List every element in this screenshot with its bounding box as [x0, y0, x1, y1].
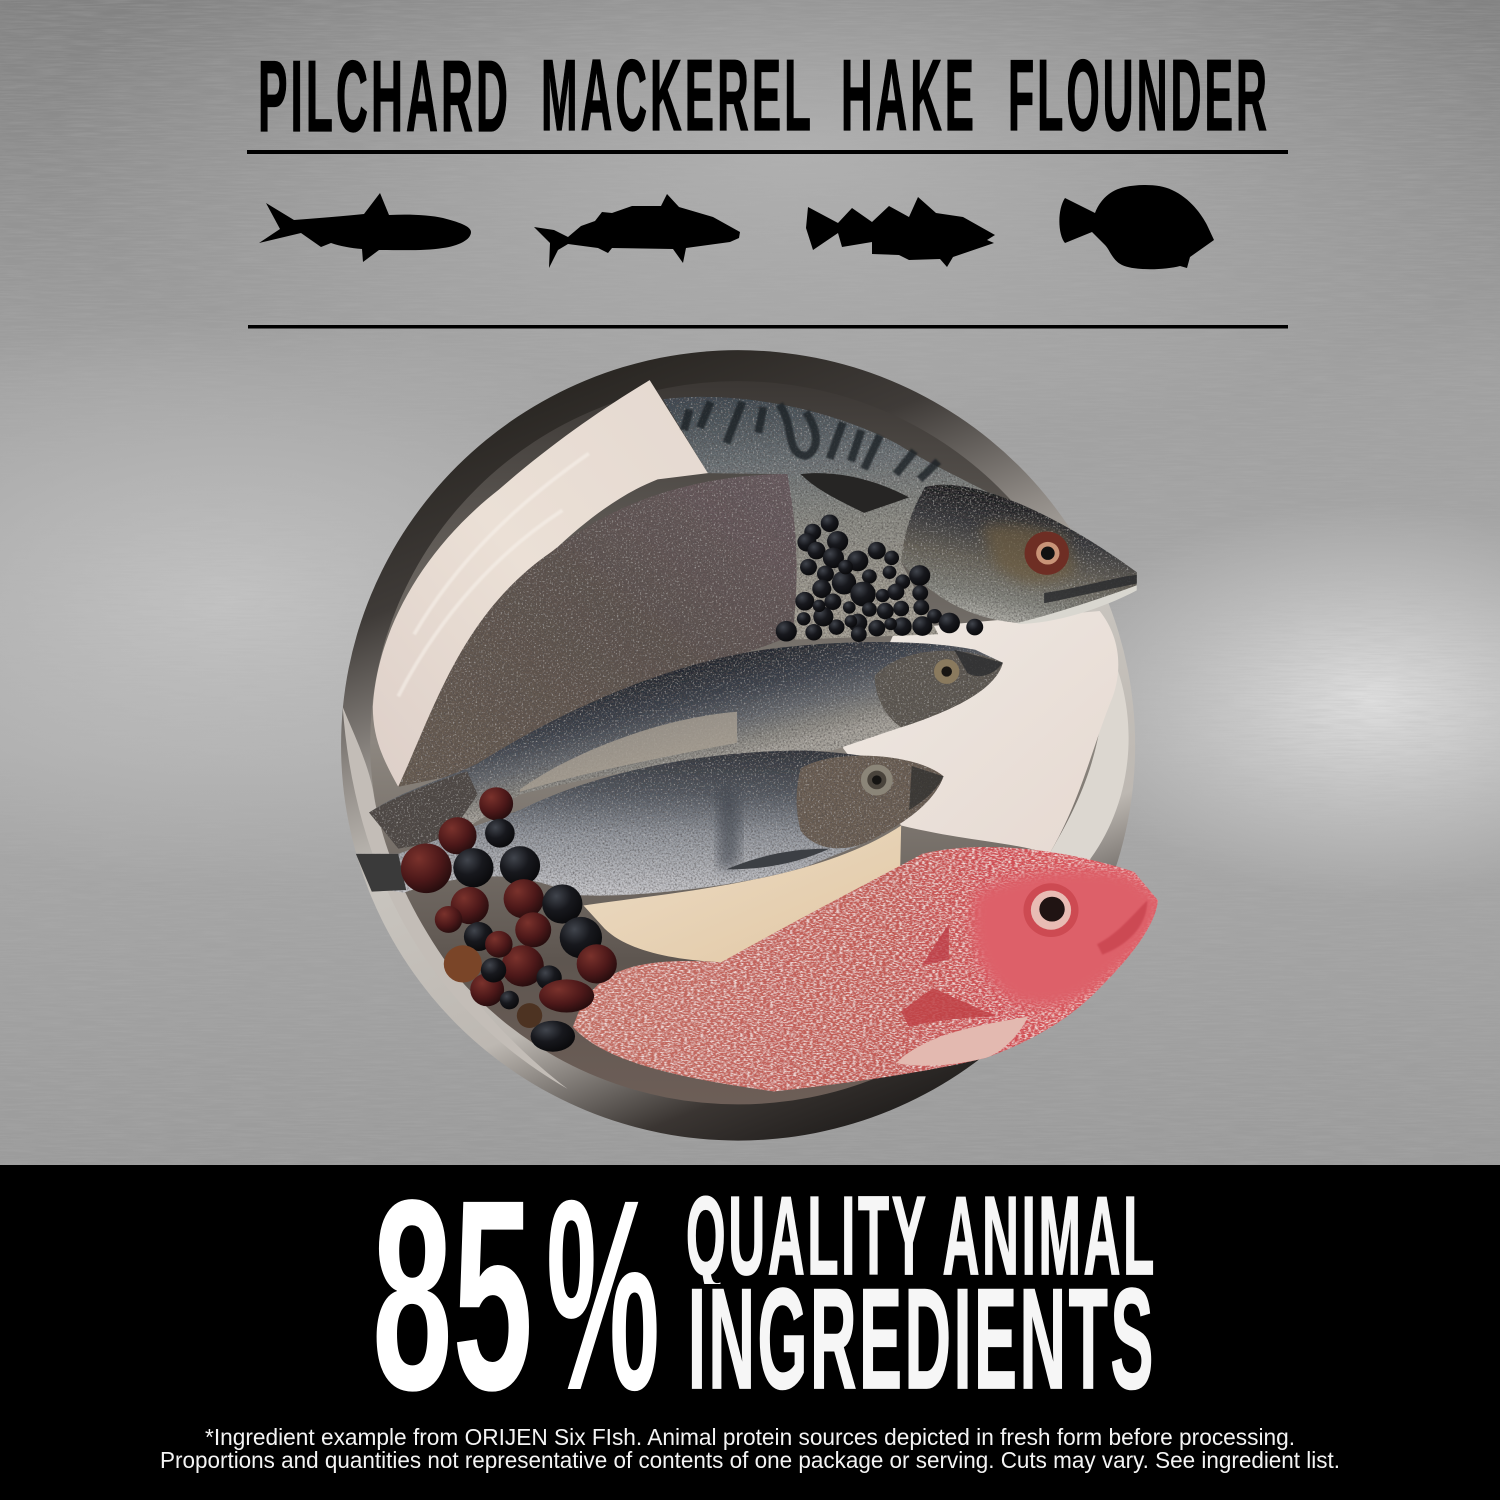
- fish silhouette icons: [259, 185, 1214, 269]
- icon: pilchard: [259, 193, 471, 262]
- black bottom banner: [0, 1165, 1500, 1500]
- red fish: [573, 847, 1163, 1091]
- icon: hake: [806, 197, 995, 267]
- title: four fish names: MACKEREL: [541, 40, 814, 152]
- bowl: [341, 350, 1135, 1141]
- fillet right: [843, 611, 1118, 854]
- flounder: [398, 474, 797, 787]
- lower pilchard: [356, 751, 944, 896]
- headline: quality animal ingredients: [688, 1196, 1154, 1390]
- title: four fish names: HAKE: [841, 40, 977, 152]
- upper pilchard: [369, 642, 1003, 849]
- juniper berries: [776, 514, 983, 642]
- infographic canvas: %: [546, 1143, 660, 1447]
- footnote: *Ingredient example from ORIJEN Six FIsh. Animal protein sources depicted in fresh form before processing.: [205, 1424, 1295, 1450]
- fillet yellow: [584, 825, 901, 962]
- title: four fish names: [258, 40, 1270, 153]
- red fish eye: [1023, 883, 1079, 937]
- upper pilchard eye: [934, 659, 959, 684]
- mackerel: [663, 397, 1137, 639]
- icon: mackerel: [534, 194, 740, 268]
- fillet upper left: [373, 380, 708, 787]
- bowl of fish and berries: [341, 350, 1163, 1141]
- title: four fish names: PILCHARD: [258, 41, 511, 153]
- footnote: [160, 1424, 1340, 1473]
- lower pilchard eye: [861, 764, 893, 795]
- tail fin: [356, 854, 406, 892]
- statistic: 85%: 85: [372, 1143, 533, 1447]
- rosehip berries: [401, 787, 617, 1052]
- mackerel eye: [1025, 531, 1069, 575]
- footnote: Proportions and quantities not representative of contents of one package or serving. Cuts may vary. See ingredient list.: [160, 1447, 1340, 1473]
- icon: flounder: [1059, 185, 1214, 269]
